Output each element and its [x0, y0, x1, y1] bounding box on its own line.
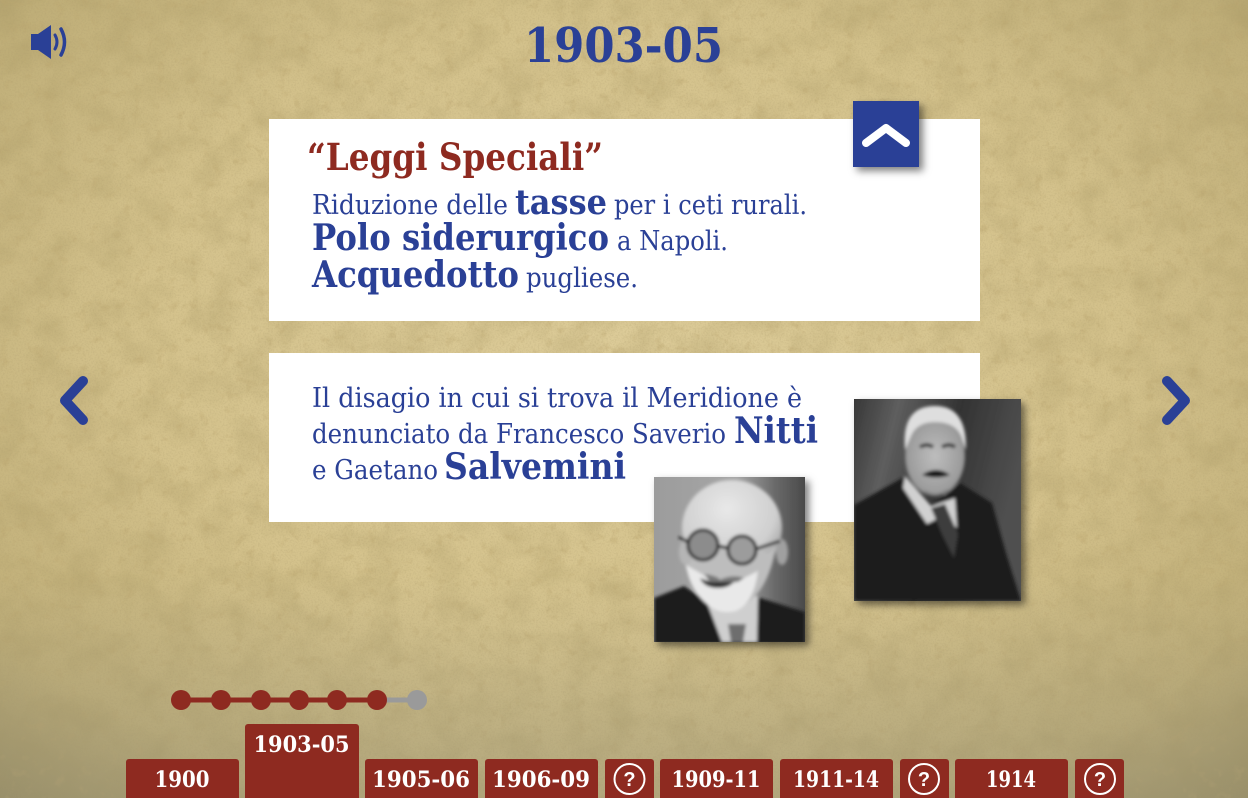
tab: 1914: 1914: [986, 767, 1036, 793]
text line: polo siderurgico: a Napoli.: [617, 226, 728, 257]
button: collapse: [853, 101, 919, 167]
text block: Salvemini: [444, 446, 626, 488]
progress track: [171, 690, 427, 710]
tab: quiz 2: ?: [918, 769, 930, 791]
tab: quiz 2: [900, 759, 949, 798]
arrow: previous: [65, 381, 83, 420]
text line: acquedotto: Acquedotto: [311, 254, 519, 296]
photo: Nitti: [854, 399, 1021, 601]
text line: polo siderurgico: Polo siderurgico: [312, 217, 609, 259]
text block: Nitti: [734, 410, 818, 452]
tab: quiz 3: ?: [1094, 769, 1106, 791]
tab: 1903-05 active: [245, 724, 359, 798]
tab: 1911-14: 1911-14: [793, 767, 879, 793]
tab: 1905-06: [365, 759, 478, 798]
text line: tasse: Riduzione delle: [312, 190, 508, 221]
tab: 1914: [955, 759, 1068, 798]
text block: Il disagio in cui si trova il Meridione è: [312, 383, 802, 414]
panel: Nitti e Salvemini: [269, 353, 980, 522]
text line: tasse: tasse: [515, 182, 607, 223]
text line: tasse: per i ceti rurali.: [614, 190, 807, 221]
tab: quiz 1: [605, 759, 654, 798]
tab: 1906-09: [485, 759, 598, 798]
tab: 1909-11: 1909-11: [672, 767, 760, 793]
tab: 1900: 1900: [154, 767, 210, 793]
text block: denunciato da Francesco Saverio: [312, 419, 726, 450]
panel: Leggi Speciali: [269, 119, 980, 321]
tab: 1911-14: [780, 759, 893, 798]
text block: [312, 383, 818, 488]
photo: Salvemini: [654, 477, 805, 644]
icon: speaker: [31, 25, 64, 59]
tab: 1906-09: 1906-09: [492, 767, 590, 793]
arrow: next: [1167, 381, 1185, 420]
text line: tasse: [312, 182, 807, 223]
tab: 1903-05 active: 1903-05: [254, 732, 350, 758]
tab: quiz 1: ?: [623, 769, 636, 791]
text line: acquedotto: pugliese.: [526, 263, 638, 294]
tab: 1900: [126, 759, 239, 798]
heading: Leggi Speciali: “Leggi Speciali”: [307, 135, 603, 179]
tab: 1905-06: 1905-06: [372, 767, 470, 793]
tab: 1909-11: [660, 759, 773, 798]
title: 1903-05: [524, 18, 723, 74]
tab: quiz 3: [1075, 759, 1124, 798]
text block: e Gaetano: [312, 455, 438, 486]
